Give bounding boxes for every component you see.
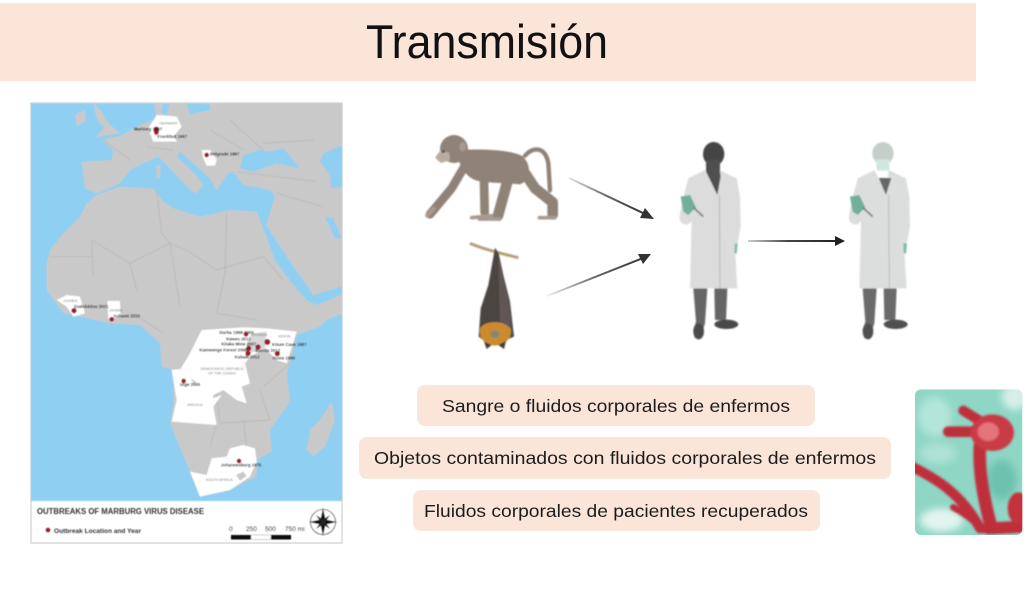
map labels	[74, 127, 307, 468]
map geography: GERMANY	[159, 121, 178, 125]
icon: monkey	[427, 135, 555, 219]
map labels: Frankfurt 1967	[157, 134, 188, 139]
scale bar: 250	[246, 526, 257, 533]
map geography: OF THE CONGO	[208, 372, 236, 376]
map labels: Belgrade 1967	[210, 151, 240, 156]
icon: recovered scientist	[849, 142, 910, 339]
callout: recovered patients: Fluidos corporales de pacientes recuperados	[424, 501, 808, 521]
compass rose	[309, 508, 337, 536]
map labels: Kamwenge Forest 2008	[199, 348, 248, 353]
legend title: OUTBREAKS OF MARBURG VIRUS DISEASE	[37, 507, 205, 516]
map legend	[37, 507, 337, 540]
trousers	[693, 288, 727, 338]
map labels: Kabale 2012	[235, 355, 260, 360]
trousers	[863, 288, 897, 338]
map geography	[31, 103, 343, 501]
icon: infected scientist	[679, 142, 741, 339]
map geography: GUINEA	[63, 299, 78, 303]
map labels: Durba 1998-2000	[219, 330, 254, 335]
shoes	[693, 320, 738, 339]
seas	[240, 147, 342, 238]
map labels: Guéckédou 2021	[74, 304, 109, 309]
map geography: KENYA	[278, 334, 291, 338]
title: Transmisión	[366, 15, 608, 68]
map labels: Kween 2012	[226, 337, 251, 342]
map labels: Ashanti 2022	[113, 313, 141, 318]
map geography: SOUTH AFRICA	[206, 478, 233, 482]
map labels: Uige 2005	[180, 382, 201, 387]
arrow: person to person	[748, 236, 845, 246]
arrow: monkey to scientist	[569, 178, 654, 219]
map labels: Marburg 1967	[134, 127, 163, 132]
legend label: Outbreak Location and Year	[54, 528, 141, 535]
callout: recovered patients	[414, 490, 820, 530]
scale bar: 0	[229, 526, 233, 533]
callout: blood and fluids: Sangre o fluidos corporales de enfermos	[442, 396, 790, 416]
glove and pen	[681, 195, 696, 215]
outbreak markers	[71, 126, 280, 463]
map geography: ANGOLA	[187, 403, 203, 407]
highlighted countries	[57, 115, 297, 497]
callout: contaminated objects: Objetos contaminados con fluidos corporales de enfermos	[374, 448, 876, 468]
coat	[679, 170, 741, 288]
map labels: Nzoia 1980	[273, 356, 296, 361]
map labels: Kitum Cave 1987	[272, 342, 307, 347]
country borders	[50, 120, 323, 447]
coat	[849, 170, 910, 288]
icon: bat	[470, 243, 518, 349]
head	[703, 142, 724, 166]
map labels: Kitaka Mine 2007	[221, 341, 257, 346]
map geography: DEMOCRATIC REPUBLIC	[201, 367, 245, 371]
map geography: UGANDA	[252, 333, 268, 337]
map geography: GHANA	[109, 308, 123, 312]
scale bar: 750 mi	[285, 526, 305, 533]
callout: blood and fluids	[418, 386, 814, 426]
title banner	[0, 3, 976, 81]
scale bar: 500	[265, 526, 276, 533]
map labels: Ibanda 2012	[255, 348, 281, 353]
legend marker	[46, 528, 50, 532]
scale bar	[229, 526, 305, 540]
map labels: Johannesburg 1975	[221, 463, 262, 468]
head	[872, 142, 894, 165]
arrow: bat to scientist	[547, 254, 651, 296]
panel: outbreak map	[31, 103, 343, 543]
glove and pen	[850, 195, 865, 215]
shoes	[863, 320, 908, 339]
callout: contaminated objects	[360, 438, 890, 478]
image: Marburg virus micrograph	[913, 383, 1024, 535]
